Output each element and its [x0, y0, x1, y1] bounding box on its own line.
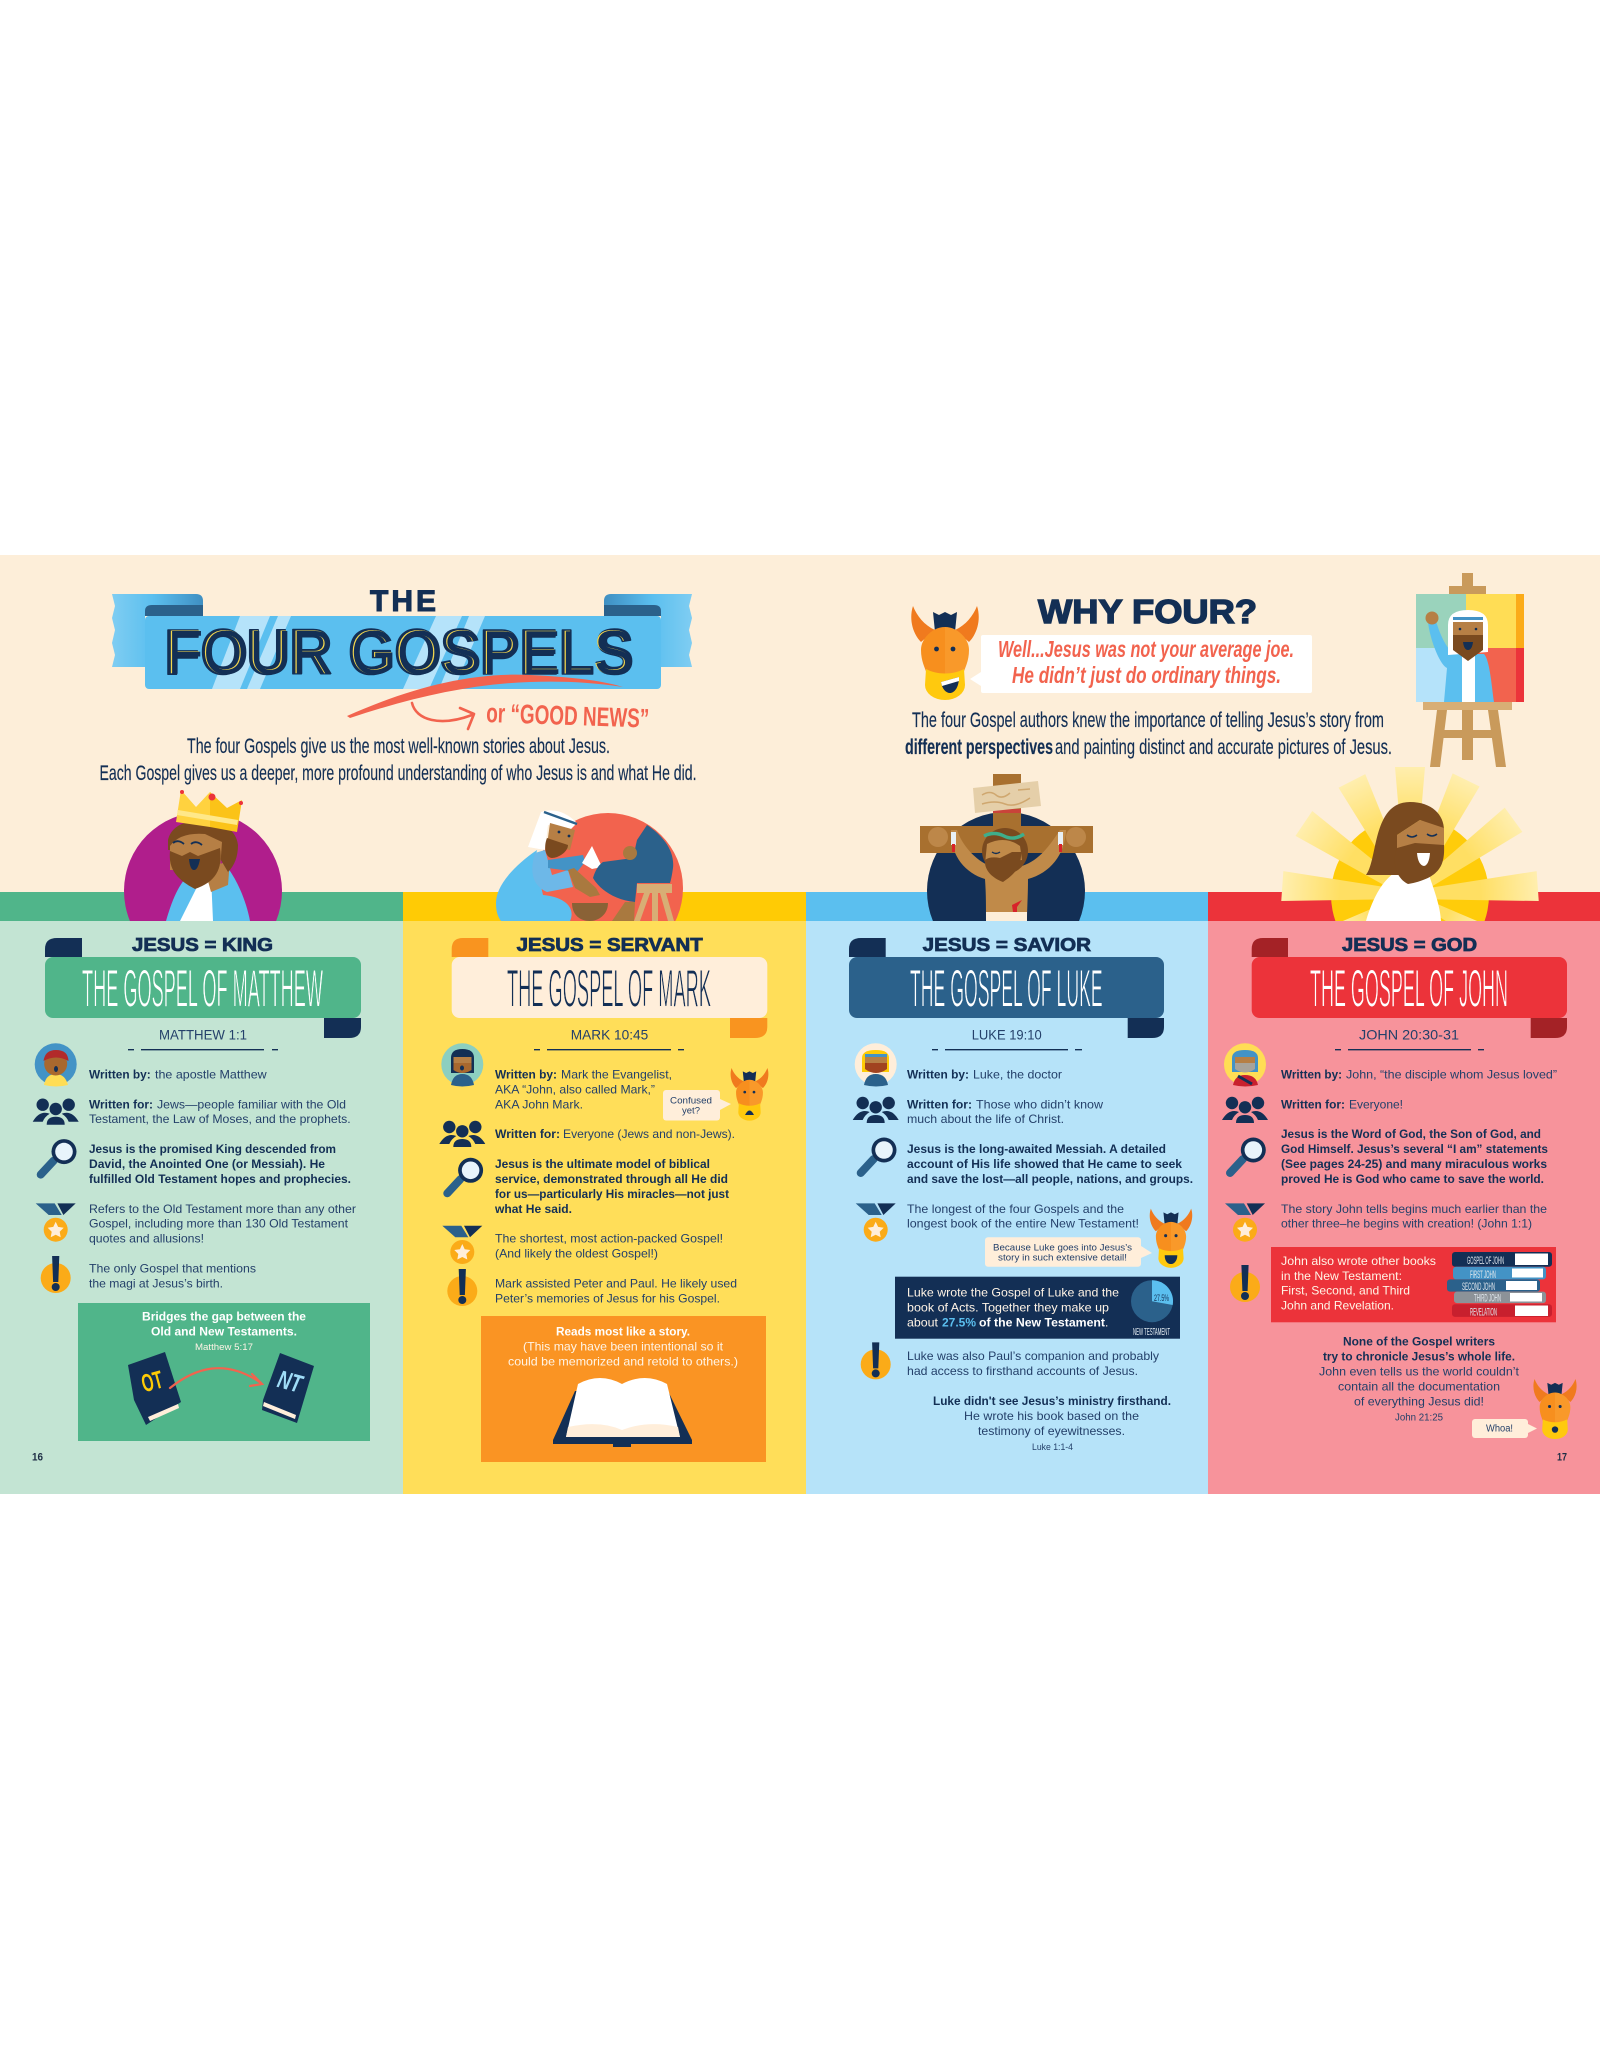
written by: Written by:	[1281, 1067, 1342, 1081]
heading: FOUR GOSPELS: FOUR GOSPELS	[166, 618, 632, 688]
servant head	[528, 810, 577, 858]
why four paragraph: The four Gospel authors knew the importance of telling Jesus’s story from	[912, 709, 1384, 732]
callout: confused yet	[663, 1090, 731, 1120]
callout: extensive detail: Because Luke goes into Jesus’s	[993, 1243, 1132, 1254]
book stack: REVELATION	[1470, 1306, 1497, 1318]
banner tails	[112, 594, 692, 667]
robe	[496, 850, 572, 921]
written by: Written by:	[89, 1067, 151, 1081]
note	[495, 1276, 737, 1305]
written for: Written for:	[907, 1097, 972, 1111]
pie chart	[1131, 1280, 1173, 1338]
icon: magnifier	[1230, 1138, 1266, 1173]
icon: surprised donkey	[1533, 1379, 1577, 1439]
scripture reference: MATTHEW 1:1	[159, 1026, 247, 1042]
hands and feet	[568, 868, 600, 897]
distinctive fact: other three–he begins with creation! (John 1:1)	[1281, 1217, 1532, 1231]
panel: Luke	[806, 921, 1208, 1494]
title banner: The Four Gospels	[112, 585, 692, 718]
written by	[907, 1067, 1062, 1081]
distinctive fact: Gospel, including more than 130 Old Testament	[89, 1217, 349, 1231]
key message	[494, 1157, 729, 1216]
callout: reads like a story	[481, 1316, 766, 1462]
or good news callout	[412, 698, 650, 734]
callout: share of New Testament	[895, 1277, 1180, 1339]
callout: reads like a story: (This may have been intentional so it	[523, 1340, 724, 1354]
head	[168, 820, 238, 892]
written for	[907, 1097, 1103, 1126]
nails and wounds	[951, 832, 1063, 919]
icon: John avatar	[1224, 1043, 1266, 1086]
icon: Luke avatar	[855, 1043, 897, 1086]
why four paragraph: different perspectives	[905, 736, 1053, 759]
icon: magnifier	[447, 1158, 483, 1193]
eyewitness note: Luke didn't see Jesus’s ministry firsthand.	[933, 1394, 1171, 1408]
icon: confused donkey	[731, 1068, 768, 1121]
note: Mark assisted Peter and Paul. He likely used	[495, 1276, 737, 1290]
eyewitness note: testimony of eyewitnesses.	[978, 1424, 1125, 1438]
callout: share of New Testament: Luke wrote the Gospel of Luke and the	[907, 1286, 1119, 1300]
speech bubble: He didn’t just do ordinary things.	[1012, 662, 1281, 688]
icon: donkey host	[911, 606, 979, 700]
speech bubble: Well...Jesus was not your average joe.	[998, 636, 1294, 662]
written by: Written by:	[907, 1067, 969, 1081]
callout: share of New Testament: book of Acts. Together they make up	[907, 1301, 1109, 1315]
written for: much about the life of Christ.	[907, 1112, 1064, 1126]
heading: FOUR GOSPELS: FOUR GOSPELS	[164, 616, 634, 688]
closing note	[1319, 1335, 1520, 1423]
heading: JESUS = GOD	[1342, 934, 1477, 955]
key message: proved He is God who came to save the world.	[1281, 1172, 1544, 1186]
illustration: Jesus is God	[1281, 767, 1539, 921]
scripture reference: JOHN 20:30-31	[1359, 1026, 1459, 1042]
callout: confused yet: yet?	[682, 1106, 700, 1117]
closing note: John 21:25	[1395, 1412, 1443, 1423]
pie chart: 27.5%	[1154, 1293, 1169, 1303]
panel: Matthew	[0, 921, 403, 1494]
icon: readers	[1222, 1097, 1268, 1123]
key message: account of His life showed that He came to seek	[907, 1157, 1182, 1171]
crown	[176, 790, 243, 832]
scripture reference: MARK 10:45	[571, 1026, 649, 1042]
callout: confused yet: Confused	[670, 1095, 712, 1106]
icon: donkey	[1150, 1209, 1192, 1268]
distinctive fact	[1281, 1202, 1547, 1231]
panel: John	[1208, 921, 1600, 1494]
callout: bridges the gap: Matthew 5:17	[195, 1342, 253, 1353]
written for: Written for:	[1281, 1097, 1345, 1111]
icon: Old Testament book	[128, 1352, 181, 1425]
robe	[1366, 872, 1441, 921]
distinctive fact: The shortest, most action-packed Gospel!	[495, 1232, 723, 1246]
callout: share of New Testament: about	[907, 1316, 939, 1330]
note: Luke was also Paul’s companion and probably	[907, 1349, 1159, 1363]
head	[1366, 802, 1444, 884]
arrow	[412, 703, 474, 729]
written by: the apostle Matthew	[155, 1067, 267, 1081]
canvas	[1416, 594, 1524, 702]
closing note: John even tells us the world couldn’t	[1319, 1364, 1520, 1378]
distinctive fact: Refers to the Old Testament more than any other	[89, 1202, 356, 1216]
portrait figure	[1426, 610, 1494, 702]
note: Peter’s memories of Jesus for his Gospel.	[495, 1291, 720, 1305]
speech bubble	[970, 635, 1312, 693]
label: or “GOOD NEWS”	[486, 698, 650, 734]
intro paragraph: Each Gospel gives us a deeper, more profound understanding of who Jesus is and what He did.	[100, 762, 696, 785]
key message	[907, 1142, 1193, 1186]
icon: Matthew avatar	[35, 1043, 77, 1086]
key message: Jesus is the Word of God, the Son of God, and	[1281, 1127, 1541, 1141]
written for: Everyone (Jews and non-Jews).	[563, 1127, 735, 1141]
key message: (See pages 24-25) and many miraculous works	[1281, 1157, 1547, 1171]
heading: JESUS = SAVIOR	[923, 934, 1091, 955]
written for: Written for:	[495, 1127, 560, 1141]
written by: Written by:	[495, 1067, 557, 1081]
written for: Those who didn’t know	[976, 1097, 1103, 1111]
bowl	[572, 903, 608, 921]
key message: service, demonstrated through all He did	[495, 1172, 728, 1186]
written by: AKA “John, also called Mark,”	[495, 1082, 655, 1096]
written for: Everyone!	[1349, 1097, 1403, 1111]
icon: medal	[442, 1226, 482, 1264]
key message: Jesus is the long-awaited Messiah. A detailed	[907, 1142, 1166, 1156]
callout: other books by John: John also wrote other books	[1281, 1254, 1436, 1268]
book stack	[1447, 1252, 1552, 1318]
icon: exclamation	[447, 1269, 477, 1306]
closing note: try to chronicle Jesus’s whole life.	[1323, 1350, 1515, 1364]
easel frame	[1423, 573, 1512, 767]
cross	[920, 774, 1093, 853]
text: THE GOSPEL OF MATTHEW	[82, 960, 323, 1018]
stool	[634, 884, 674, 921]
key message	[1281, 1127, 1548, 1186]
seated figure	[593, 825, 673, 902]
heading: JESUS = KING	[132, 934, 273, 955]
callout: bridges the gap: Bridges the gap between the	[142, 1309, 306, 1323]
key message: Jesus is the promised King descended from	[89, 1142, 336, 1156]
intro paragraph	[100, 735, 696, 785]
closing note: of everything Jesus did!	[1354, 1394, 1484, 1408]
ribbon	[45, 938, 361, 1038]
intro paragraph: The four Gospels give us the most well-known stories about Jesus.	[187, 735, 610, 758]
panel: Mark: THE GOSPEL OF MARK	[507, 960, 711, 1018]
callout: other books by John	[1271, 1247, 1556, 1322]
note: the magi at Jesus’s birth.	[89, 1276, 223, 1290]
distinctive fact: The longest of the four Gospels and the	[907, 1202, 1124, 1216]
page background	[0, 555, 1600, 1494]
sign	[973, 781, 1041, 813]
eyewitness note: Luke 1:1-4	[1032, 1442, 1073, 1453]
note: had access to firsthand accounts of Jesus.	[907, 1364, 1138, 1378]
written for: Jews—people familiar with the Old	[157, 1097, 346, 1111]
distinctive fact	[907, 1202, 1139, 1231]
loincloth	[986, 912, 1027, 921]
written by: Luke, the doctor	[973, 1067, 1062, 1081]
written for: Written for:	[89, 1097, 153, 1111]
key message: fulfilled Old Testament hopes and prophecies.	[89, 1172, 351, 1186]
icon: New Testament book	[262, 1353, 314, 1423]
book stack: SECOND JOHN	[1462, 1281, 1495, 1293]
heading: FOUR GOSPELS: FOUR GOSPELS	[167, 619, 633, 688]
illustration: Jesus the servant	[496, 810, 683, 921]
distinctive fact: longest book of the entire New Testament!	[907, 1217, 1139, 1231]
why four paragraph	[905, 709, 1392, 759]
banner body	[145, 616, 661, 689]
callout: whoa: Whoa!	[1486, 1423, 1513, 1434]
distinctive fact	[89, 1202, 356, 1246]
written for	[1281, 1097, 1403, 1111]
why four paragraph: and painting distinct and accurate pictures of Jesus.	[1055, 736, 1392, 759]
icon: exclamation	[41, 1256, 71, 1293]
written by: John, “the disciple whom Jesus loved”	[1346, 1067, 1557, 1081]
written by	[495, 1067, 672, 1111]
book stack: FIRST JOHN	[1470, 1269, 1496, 1281]
book stack: GOSPEL OF JOHN	[1467, 1255, 1504, 1267]
distinctive fact: (And likely the oldest Gospel!)	[495, 1247, 658, 1261]
sun rays	[1281, 767, 1539, 921]
banner glints	[212, 616, 485, 689]
callout: other books by John: John and Revelation.	[1281, 1299, 1394, 1313]
icon: readers	[439, 1121, 485, 1147]
note	[89, 1262, 256, 1290]
illustration: Jesus the king	[124, 790, 282, 921]
icon: magnifier	[861, 1138, 896, 1173]
closing note: contain all the documentation	[1338, 1379, 1500, 1393]
distinctive fact	[495, 1232, 723, 1261]
panel: Mark	[403, 921, 806, 1494]
callout: extensive detail	[985, 1237, 1152, 1267]
callout: reads like a story: could be memorized and retold to others.)	[508, 1354, 738, 1368]
written by	[89, 1067, 267, 1081]
written by: Mark the Evangelist,	[561, 1067, 672, 1081]
icon: Old Testament book: OT	[138, 1366, 166, 1398]
icon: easel with portrait	[1416, 573, 1524, 767]
note: The only Gospel that mentions	[89, 1262, 256, 1276]
body	[951, 830, 1066, 921]
key message: what He said.	[494, 1202, 572, 1216]
page number: 16	[32, 1452, 43, 1464]
icon: readers	[853, 1097, 899, 1123]
ribbon	[849, 938, 1164, 1038]
icon: medal	[36, 1203, 76, 1242]
heading: THE: THE	[370, 585, 436, 618]
icon: Mark avatar	[441, 1043, 483, 1086]
panel: Luke: THE GOSPEL OF LUKE	[910, 960, 1103, 1018]
callout: share of New Testament: 27.5%	[942, 1316, 976, 1330]
closing note: None of the Gospel writers	[1343, 1335, 1495, 1349]
icon: magnifier	[41, 1139, 76, 1175]
arrow	[170, 1368, 262, 1388]
robe	[166, 868, 250, 921]
swoosh underline	[347, 675, 623, 718]
page number: 17	[1557, 1452, 1567, 1464]
ribbon	[452, 938, 767, 1038]
icon: exclamation	[861, 1342, 891, 1379]
note	[907, 1349, 1159, 1378]
distinctive fact: The story John tells begins much earlier than the	[1281, 1202, 1547, 1216]
icon: readers	[33, 1098, 79, 1125]
callout: other books by John: in the New Testament:	[1281, 1269, 1402, 1283]
eyewitness note: He wrote his book based on the	[964, 1409, 1139, 1423]
key message: and save the lost—all people, nations, and groups.	[907, 1172, 1193, 1186]
key message: Jesus is the ultimate model of biblical	[495, 1157, 710, 1171]
callout: extensive detail: story in such extensive detail!	[998, 1252, 1127, 1263]
callout: reads like a story: Reads most like a story.	[556, 1325, 690, 1339]
callout: share of New Testament: NEW TESTAMENT	[1133, 1327, 1170, 1338]
eyewitness note	[933, 1394, 1171, 1453]
written by: AKA John Mark.	[495, 1097, 583, 1111]
towel	[582, 846, 602, 869]
icon: open book	[553, 1378, 692, 1447]
icon: exclamation	[1230, 1265, 1260, 1302]
callout: share of New Testament: .	[1105, 1316, 1108, 1330]
illustration: Jesus the savior	[920, 774, 1093, 921]
head	[982, 828, 1028, 882]
key message	[89, 1142, 351, 1186]
callout: bridges the gap: Old and New Testaments.	[151, 1324, 297, 1338]
why four heading: WHY FOUR?	[1038, 593, 1257, 630]
icon: medal	[1225, 1203, 1265, 1242]
callout: whoa	[1472, 1419, 1537, 1438]
written for	[89, 1097, 351, 1126]
written for: Testament, the Law of Moses, and the prophets.	[89, 1112, 351, 1126]
icon: medal	[856, 1203, 896, 1242]
callout: share of New Testament: of the New Testament	[979, 1316, 1105, 1330]
book stack: THIRD JOHN	[1474, 1293, 1501, 1305]
key message: David, the Anointed One (or Messiah). He	[89, 1157, 325, 1171]
key message: for us—particularly His miracles—not just	[495, 1187, 729, 1201]
callout: other books by John: First, Second, and Third	[1281, 1284, 1410, 1298]
colour bands	[0, 892, 1600, 921]
scripture reference: LUKE 19:10	[972, 1026, 1042, 1042]
icon: New Testament book: NT	[275, 1365, 307, 1399]
callout: bridges the gap	[78, 1303, 370, 1441]
key message: God Himself. Jesus’s several “I am” statements	[1281, 1142, 1548, 1156]
ribbon	[1252, 938, 1567, 1038]
heading: JESUS = SERVANT	[517, 934, 703, 955]
distinctive fact: quotes and allusions!	[89, 1232, 204, 1246]
